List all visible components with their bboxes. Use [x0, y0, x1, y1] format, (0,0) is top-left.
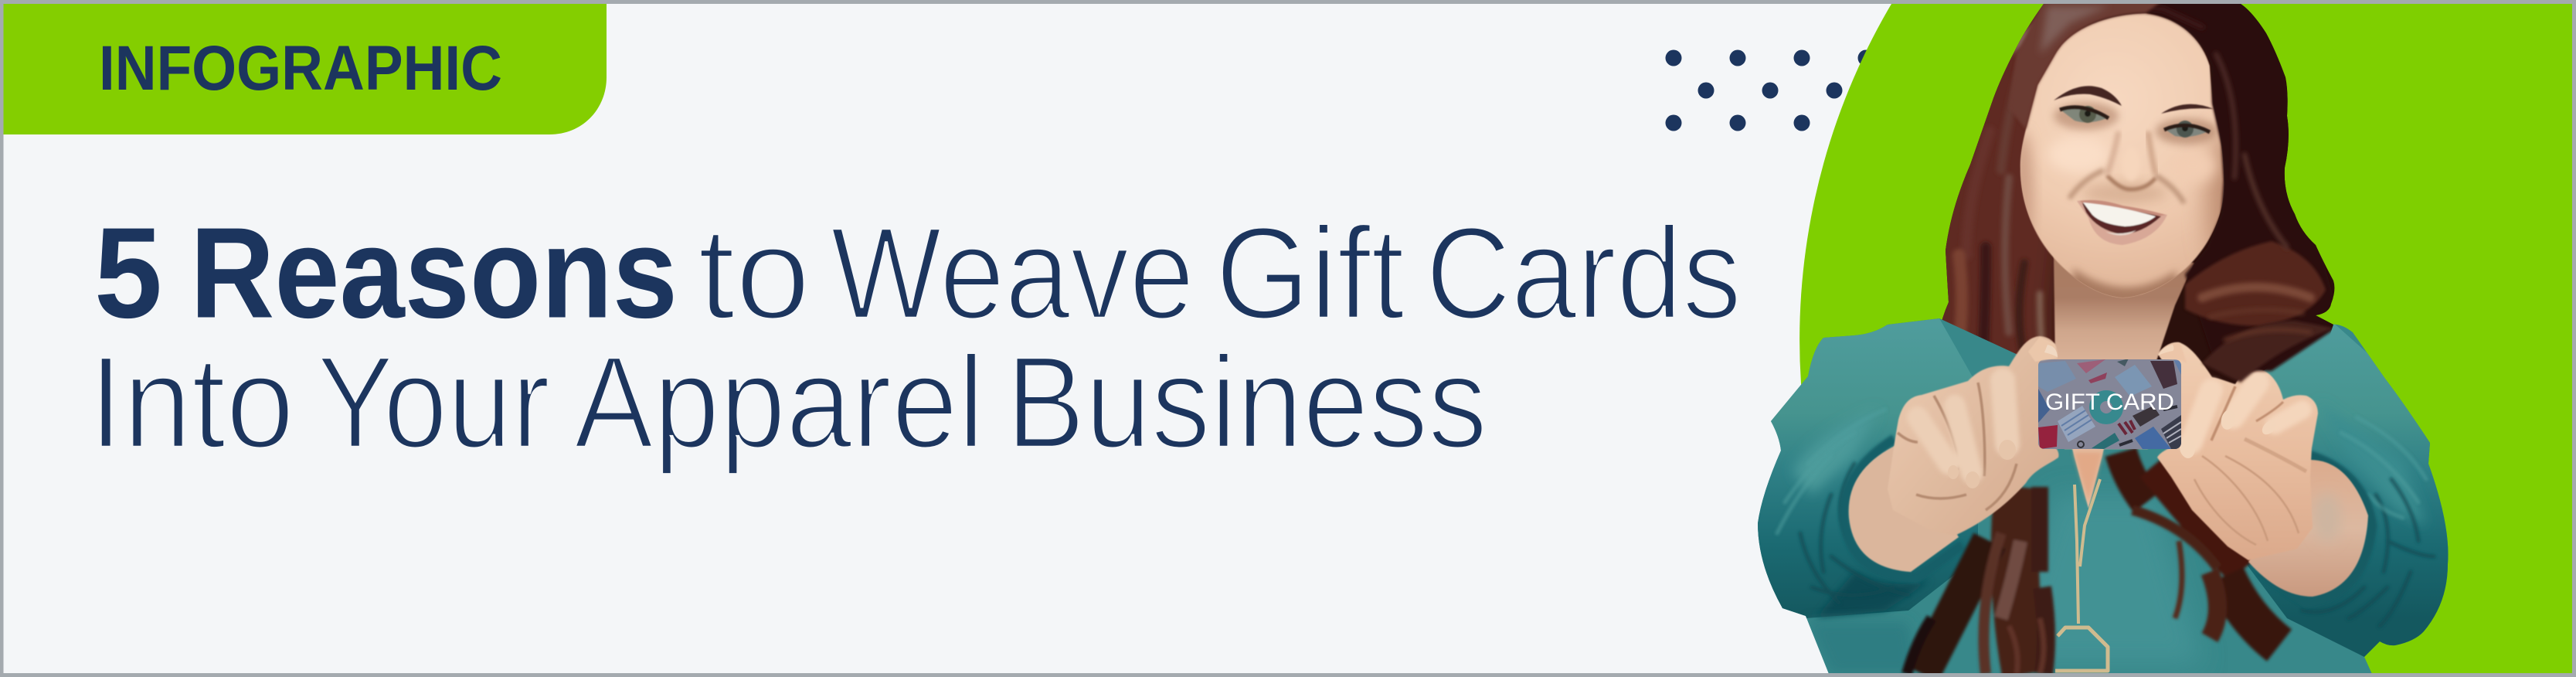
- right fingernails: [2180, 410, 2272, 458]
- title light part: Apparel: [574, 329, 984, 476]
- neck and chest: [2054, 255, 2194, 509]
- face shading: [2194, 132, 2224, 247]
- sleeve fold lines: [1798, 461, 1859, 597]
- title light part: Business: [1006, 329, 1487, 476]
- necklace: [2055, 479, 2108, 671]
- shirt: [1746, 309, 2457, 674]
- right hand: [2157, 342, 2318, 560]
- fingers over card: [2029, 337, 2182, 362]
- dot pattern: [1666, 49, 1874, 131]
- green circle backdrop: [1799, 0, 2576, 677]
- title light part: [89, 200, 1742, 476]
- title light part: Cards: [1426, 200, 1742, 347]
- left hand: [1888, 336, 2058, 536]
- card apparel collage: [2038, 359, 2181, 449]
- left sleeve: [1754, 318, 1978, 618]
- right fingers: [2191, 383, 2302, 442]
- hair front: [2009, 0, 2341, 383]
- nose: [2069, 131, 2184, 203]
- left fingers: [1918, 380, 2007, 473]
- left fingernails: [1948, 440, 2016, 488]
- title light part: Gift: [1215, 200, 1405, 347]
- tab label: INFOGRAPHIC: [99, 33, 502, 104]
- eyebrows: [2054, 86, 2214, 114]
- title light part: Into: [89, 329, 294, 476]
- right hand creases: [2194, 386, 2306, 545]
- mouth: [2077, 200, 2167, 245]
- left finger gaps: [1898, 383, 2017, 510]
- hair over forehead left: [2009, 0, 2163, 129]
- title light part: Your: [317, 329, 550, 476]
- green gap in curls: [2293, 284, 2309, 308]
- smile folds: [2069, 170, 2184, 203]
- hair curl highlights: [2140, 6, 2316, 343]
- torso light: [2041, 502, 2187, 657]
- forearms: [1849, 446, 2368, 597]
- gift card: [2038, 359, 2181, 449]
- title bold part: Reasons: [190, 201, 678, 345]
- cuffs: [1844, 439, 1963, 578]
- face: [2020, 12, 2224, 298]
- hair back: [1942, 4, 2335, 385]
- right sleeve: [2241, 321, 2457, 657]
- lower hair: [1907, 452, 2279, 674]
- right lower hair: [2121, 452, 2146, 502]
- category tab: [0, 0, 607, 134]
- title: [89, 200, 1742, 476]
- title light part: Weave: [831, 200, 1195, 347]
- card label: GIFT CARD: [2045, 390, 2174, 415]
- sleeve shading: [1793, 422, 1867, 495]
- title bold part: 5: [94, 201, 162, 345]
- eyes: [2060, 106, 2210, 138]
- title light part: to: [698, 200, 811, 347]
- photo: woman holding gift card: [1746, 0, 2457, 674]
